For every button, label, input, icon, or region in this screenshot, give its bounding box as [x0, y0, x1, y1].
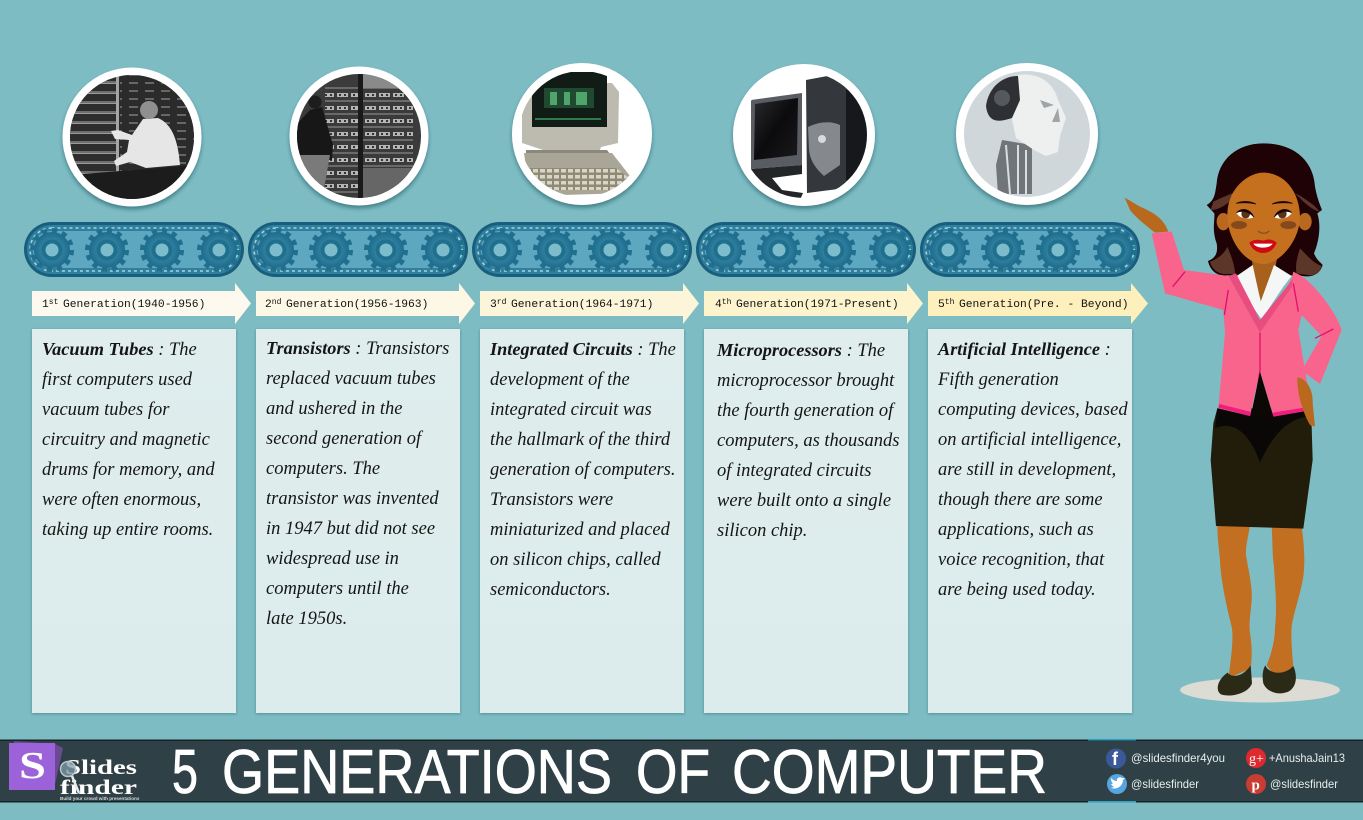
jacket — [1152, 232, 1342, 417]
arrow label: 3rd generation: rd — [497, 298, 507, 307]
panel: microprocessors — [704, 329, 908, 713]
panel: transistors: widespread use in — [266, 549, 399, 569]
panel: artificial intelligence — [928, 329, 1132, 713]
panel: artificial intelligence: applications, such as — [938, 520, 1094, 540]
arrow label: 2nd generation: nd — [272, 298, 282, 307]
arrow label: 1st generation — [32, 283, 251, 324]
panel: transistors: Transistors : Transistors — [266, 338, 449, 359]
arrow label: 2nd generation: 2 — [265, 299, 272, 311]
arrow label: 2nd generation: Generation(1956-1963) — [286, 299, 428, 311]
cheeks — [1231, 221, 1247, 229]
arrow label: 5th generation: th — [945, 298, 955, 307]
panel: transistors: and ushered in the — [266, 399, 403, 419]
panel: integrated circuits: integrated circuit was — [490, 400, 652, 420]
panel: vacuum tubes: first computers used — [42, 370, 193, 390]
social: pinterest: @slidesfinder — [1270, 777, 1338, 791]
arrow label: 4th generation: Generation(1971-Present) — [736, 299, 899, 311]
panel: transistors: in 1947 but did not see — [266, 519, 435, 539]
panel: integrated circuits: Transistors were — [490, 490, 613, 510]
floor shadow — [1180, 678, 1340, 702]
arrow label: 1st generation: Generation(1940-1956) — [63, 299, 205, 311]
logo: Slides Finder — [9, 741, 140, 801]
logo: Slides Finder: S — [19, 745, 46, 787]
panel: transistors: second generation of — [266, 429, 424, 449]
panel: microprocessors: computers, as thousands — [717, 431, 899, 451]
social: twitter: @slidesfinder — [1131, 777, 1199, 791]
blouse under jacket — [1251, 372, 1273, 417]
footer title bar — [0, 738, 1363, 807]
eyes — [1237, 210, 1254, 219]
arrow label: 1st generation: 1 — [42, 299, 49, 311]
panel: microprocessors: of integrated circuits — [717, 461, 872, 481]
panel: artificial intelligence: Artificial Intelligence : — [937, 339, 1111, 360]
illustration: presenter woman — [1125, 143, 1342, 703]
social: google plus: +AnushaJain13 — [1269, 751, 1345, 765]
left hand — [1125, 198, 1168, 233]
social: google plus — [1246, 748, 1345, 768]
photo: first generation vacuum tube computer — [62, 68, 202, 206]
gear conveyor 5 — [920, 222, 1140, 277]
arrow label: 4th generation: th — [722, 298, 732, 307]
panel: transistors — [256, 329, 460, 713]
panel: vacuum tubes: taking up entire rooms. — [42, 520, 213, 540]
hair — [1207, 143, 1323, 276]
panel: integrated circuits: generation of computers. — [490, 460, 676, 480]
panel: vacuum tubes: were often enormous, — [42, 490, 201, 510]
photo: second generation transistor computer — [290, 66, 428, 206]
logo: Slides Finder: finder — [60, 775, 137, 799]
panel: transistors: computers until the — [266, 579, 409, 599]
collar — [1237, 265, 1292, 319]
arrow label: 4th generation — [704, 283, 923, 324]
panel: artificial intelligence: are being used today. — [938, 580, 1096, 600]
social: google plus: g+ — [1249, 752, 1264, 767]
arrow label: 3rd generation: 3 — [490, 299, 497, 311]
arrow label: 3rd generation — [480, 283, 699, 324]
social: pinterest: p — [1252, 778, 1260, 794]
panel: integrated circuits — [480, 329, 684, 713]
photo: fifth generation robot head — [956, 63, 1098, 205]
panel: artificial intelligence: computing devices, based — [938, 400, 1128, 420]
panel: vacuum tubes — [32, 329, 236, 713]
panel: microprocessors: silicon chip. — [717, 521, 807, 541]
panel: microprocessors: the fourth generation of — [717, 401, 896, 421]
panel: microprocessors: microprocessor brought — [717, 371, 895, 391]
arrow label: 4th generation: 4 — [715, 299, 722, 311]
panel: artificial intelligence: voice recognition, that — [938, 550, 1105, 570]
panel: artificial intelligence: Fifth generation — [937, 370, 1059, 390]
photo: fourth generation desktop computer — [733, 64, 875, 206]
arrow label: 2nd generation — [256, 283, 475, 324]
panel: integrated circuits: on silicon chips, called — [490, 550, 661, 570]
panel: vacuum tubes: Vacuum Tubes : The — [42, 339, 197, 360]
panel: transistors: late 1950s. — [266, 609, 347, 629]
social: pinterest — [1246, 774, 1338, 794]
neck — [1252, 257, 1277, 303]
panel: integrated circuits: the hallmark of the third — [490, 430, 671, 450]
title: GENERATIONS — [222, 738, 612, 807]
social: facebook: @slidesfinder4you — [1131, 751, 1225, 765]
panel: artificial intelligence: are still in development, — [938, 460, 1116, 480]
gear conveyor 4 — [696, 222, 916, 277]
title: COMPUTER — [732, 738, 1047, 807]
panel: vacuum tubes: drums for memory, and — [42, 460, 215, 480]
panel: integrated circuits: semiconductors. — [490, 580, 611, 600]
social: facebook — [1106, 748, 1225, 769]
title: 5 — [172, 738, 198, 807]
upper body — [1125, 143, 1342, 427]
gear conveyor 1 — [24, 222, 244, 277]
panel: transistors: transistor was invented — [266, 489, 439, 509]
panel: vacuum tubes: circuitry and magnetic — [42, 430, 211, 450]
arrow label: 1st generation: st — [49, 298, 58, 307]
panel: artificial intelligence: on artificial intelligence, — [938, 430, 1121, 450]
panel: transistors: computers. The — [266, 459, 380, 479]
mouth — [1249, 240, 1277, 253]
logo: Slides Finder: Build your crowd with presentations — [60, 796, 140, 801]
panel: artificial intelligence: though there are some — [938, 490, 1103, 510]
legs, skirt and shoes — [1211, 408, 1313, 695]
panel: integrated circuits: development of the — [490, 370, 630, 390]
arrow label: 5th generation: 5 — [938, 299, 945, 311]
panel: vacuum tubes: vacuum tubes for — [42, 400, 170, 420]
arrow label: 3rd generation: Generation(1964-1971) — [511, 299, 653, 311]
panel: microprocessors: Microprocessors : The — [716, 340, 885, 361]
photo: third generation computer — [512, 63, 652, 205]
arrow label: 5th generation — [928, 283, 1148, 324]
panel: microprocessors: were built onto a single — [717, 491, 891, 511]
panel: transistors: replaced vacuum tubes — [266, 369, 436, 389]
gear conveyor 3 — [472, 222, 692, 277]
title: OF — [636, 738, 710, 807]
social: twitter — [1107, 774, 1199, 794]
gear conveyor 2 — [248, 222, 468, 277]
arrow label: 5th generation: Generation(Pre. - Beyond) — [959, 299, 1128, 311]
social: facebook: f — [1112, 749, 1119, 769]
ears and face — [1217, 213, 1230, 230]
panel: integrated circuits: miniaturized and placed — [490, 520, 671, 540]
logo: Slides Finder: Slides — [65, 755, 137, 779]
hand on hip — [1297, 377, 1315, 427]
nose — [1258, 231, 1269, 233]
panel: integrated circuits: Integrated Circuits : The — [489, 339, 676, 360]
